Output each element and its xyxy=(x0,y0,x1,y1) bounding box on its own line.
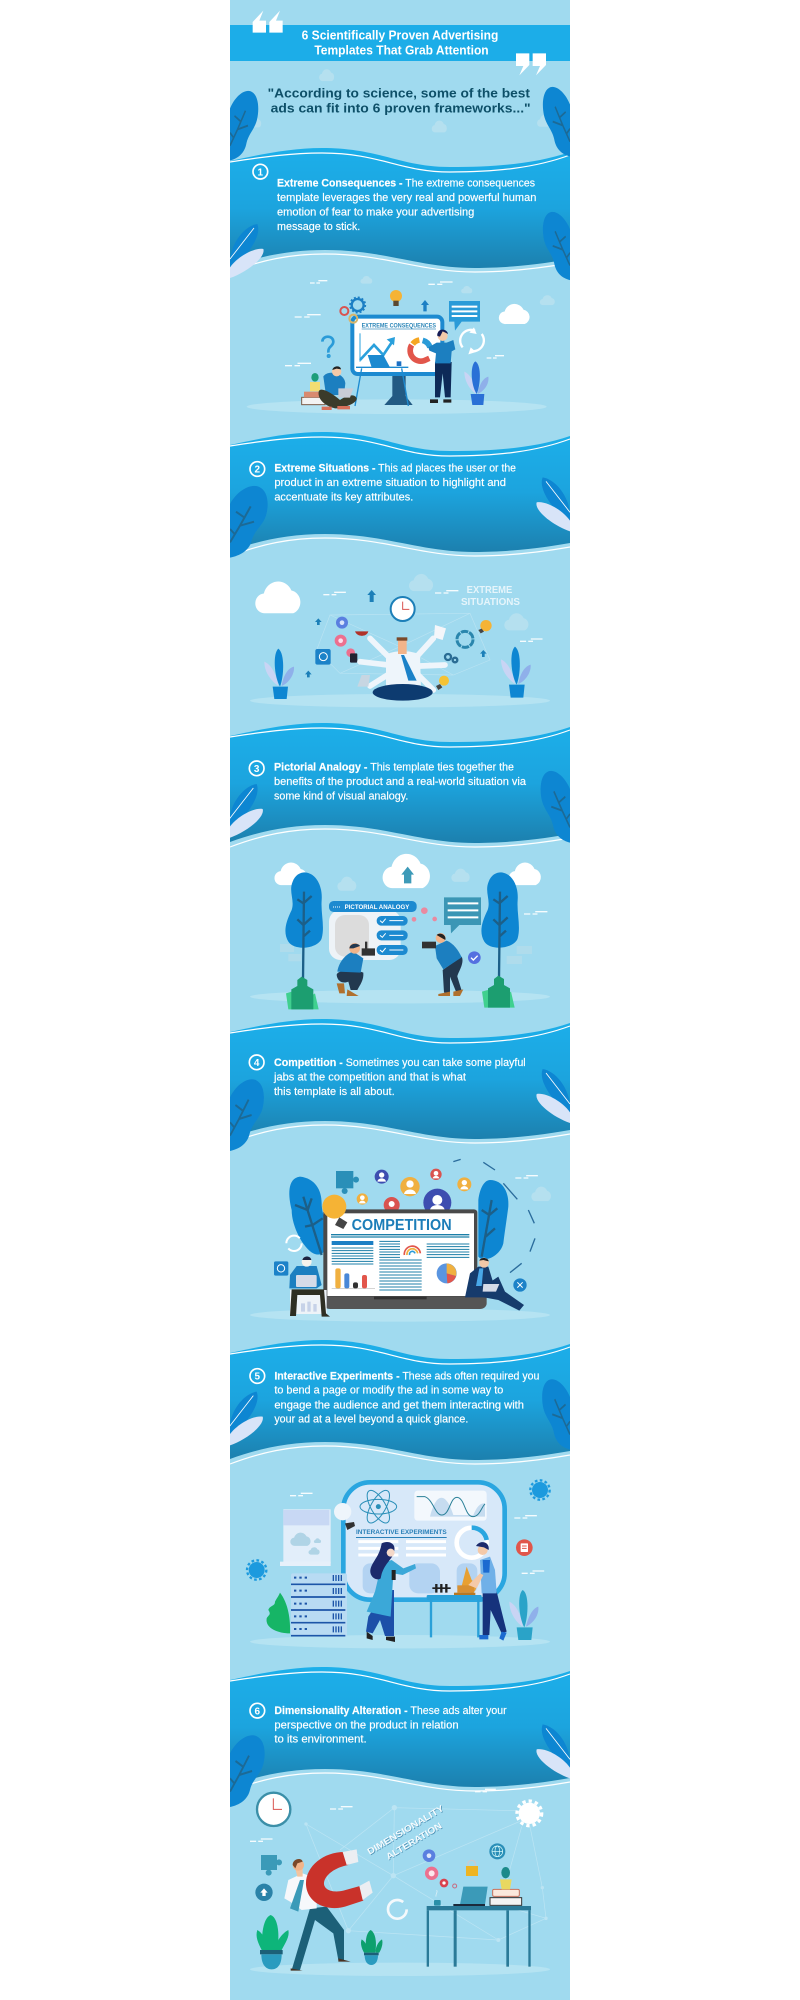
books and cactus xyxy=(490,1867,522,1905)
green leaf xyxy=(267,1593,290,1633)
window xyxy=(280,1509,331,1566)
badge 2 xyxy=(250,462,265,476)
light bulb xyxy=(390,290,402,306)
icon: opening quote marks xyxy=(253,11,283,33)
icon: band 3 tree xyxy=(541,771,570,843)
magnet xyxy=(306,1849,373,1908)
arrow up in cloud xyxy=(401,867,414,883)
badge 1 xyxy=(253,164,268,179)
small plant xyxy=(361,1930,382,1965)
icon: band 1 right tree xyxy=(543,212,570,280)
section 1 text xyxy=(230,87,570,280)
potted plant right xyxy=(501,647,531,698)
text: extreme consequences: message to stick. xyxy=(277,221,360,233)
icon: band 5 tree xyxy=(542,1379,570,1450)
donut xyxy=(388,1900,407,1919)
badge 4 xyxy=(249,1055,264,1070)
section 3 text xyxy=(229,761,570,843)
rounded blocks xyxy=(363,1563,477,1593)
woman scientist xyxy=(366,1542,416,1642)
section 5 text xyxy=(229,1369,570,1450)
speech bubble xyxy=(449,301,480,331)
network lines xyxy=(317,613,490,675)
text: pictorial analogy: some kind of visual analogy. xyxy=(274,790,408,802)
badge 3 xyxy=(249,761,264,776)
dashes xyxy=(524,912,547,914)
label: extreme situations: SITUATIONS xyxy=(461,597,520,608)
text: interactive experiments: engage the audience and get them interacting with xyxy=(274,1399,524,1411)
icon: band 3 plume leaves xyxy=(229,784,263,838)
pictorial analogy card: PICTORIAL ANALOGY xyxy=(345,904,410,911)
ring chart xyxy=(457,631,473,647)
badge 6: 6 xyxy=(255,1706,261,1717)
icon: top left tree xyxy=(230,91,258,161)
potted plant left xyxy=(264,649,294,699)
dashes xyxy=(285,281,504,366)
timer bubble xyxy=(274,1261,288,1276)
text: extreme consequences: emotion of fear to make your advertising xyxy=(277,206,474,218)
atom icon xyxy=(360,1487,397,1526)
left tree xyxy=(285,872,323,980)
rotated label: dimensionality alteration: ALTERATION xyxy=(384,1821,444,1862)
right tree xyxy=(481,872,519,978)
faint boxes xyxy=(280,944,532,964)
arrow badge xyxy=(255,1884,273,1901)
microscope xyxy=(454,1567,476,1595)
line chart xyxy=(360,333,395,362)
laptop xyxy=(368,355,390,367)
man with magnet xyxy=(284,1859,351,1971)
badge 1: 1 xyxy=(258,167,264,178)
monitor stand xyxy=(384,376,413,405)
title xyxy=(302,30,498,57)
clouds xyxy=(274,854,541,891)
man right seated xyxy=(465,1258,524,1311)
section 4 text xyxy=(230,1055,570,1151)
monitor title: EXTREME CONSEQUENCES xyxy=(362,322,436,329)
text: extreme consequences: Extreme Consequences - The extreme consequences xyxy=(277,178,535,190)
dashes xyxy=(515,1176,538,1178)
icon: band 5 plume leaves xyxy=(229,1392,263,1446)
icon: band 2 plume leaves xyxy=(536,477,570,531)
badge 4: 4 xyxy=(254,1058,260,1069)
light bulb xyxy=(334,1503,355,1530)
avatars xyxy=(357,1169,471,1217)
badge check xyxy=(468,951,481,964)
arc chart xyxy=(404,1246,420,1255)
dashes xyxy=(250,1789,496,1841)
pictorial analogy card xyxy=(329,901,417,960)
man left on box xyxy=(289,1256,330,1317)
man scientist xyxy=(468,1542,507,1641)
icon: closing quote marks xyxy=(516,53,546,75)
icon: band 6 plume leaves xyxy=(536,1724,570,1778)
social icons xyxy=(315,617,357,665)
icon: band 2 tree xyxy=(230,486,268,558)
plant green xyxy=(257,1915,289,1969)
text: extreme consequences xyxy=(277,178,536,233)
wave band 4 xyxy=(230,1019,570,1143)
desk xyxy=(427,1906,531,1967)
quote subheading: ads can fit into 6 proven frameworks..." xyxy=(271,101,531,116)
text: pictorial analogy xyxy=(274,762,526,802)
illustration 2: extreme situations xyxy=(250,574,550,707)
quote subheading: "According to science, some of the best xyxy=(268,85,531,100)
text: pictorial analogy: benefits of the product and a real-world situation via xyxy=(274,776,526,788)
label: extreme situations: EXTREME xyxy=(467,585,513,596)
question mark xyxy=(322,337,333,357)
left tree xyxy=(289,1177,329,1255)
lab table xyxy=(427,1595,482,1637)
text: interactive experiments: your ad at a level beyond a quick glance. xyxy=(274,1414,468,1426)
red document badge xyxy=(516,1539,533,1556)
woman presenter xyxy=(428,330,455,403)
refresh icon xyxy=(460,327,484,354)
icon: band 4 tree xyxy=(230,1079,264,1151)
text: extreme consequences: template leverages the very real and powerful human xyxy=(277,192,536,204)
badge 3: 3 xyxy=(254,764,260,775)
icon: top right tree xyxy=(543,87,570,157)
donut chart xyxy=(410,340,430,361)
puzzle piece xyxy=(261,1855,282,1876)
illustration 3: pictorial analogy xyxy=(250,854,550,1009)
ground xyxy=(250,990,550,1003)
bending photographer xyxy=(422,933,463,996)
multi-armed man xyxy=(355,625,446,701)
big display frame xyxy=(343,1482,505,1600)
wave band 6 xyxy=(230,1667,570,1791)
illustration 4: competition xyxy=(250,1159,551,1322)
title banner xyxy=(230,25,570,61)
ground xyxy=(250,694,550,707)
section 2 text xyxy=(230,462,570,558)
clock xyxy=(257,1793,290,1826)
donut xyxy=(457,1528,487,1558)
crouching photographer xyxy=(337,942,375,996)
arrow up xyxy=(421,300,429,311)
article lines xyxy=(331,1235,469,1290)
infographic panel xyxy=(229,0,570,2000)
icon: band 4 plume leaves xyxy=(536,1069,570,1123)
rotated label: dimensionality alteration: DIMENSIONALITY xyxy=(366,1803,446,1857)
text: dimensionality alteration: perspective on the product in relation xyxy=(274,1720,459,1732)
dashes xyxy=(290,1493,544,1573)
bulbs xyxy=(436,620,492,690)
ground xyxy=(250,1963,550,1976)
clouds xyxy=(255,574,528,630)
text: interactive experiments: Interactive Experiments - These ads often required you xyxy=(274,1370,539,1382)
right tree xyxy=(478,1180,508,1259)
command badge xyxy=(513,1278,527,1292)
badge 5: 5 xyxy=(255,1372,261,1383)
text: dimensionality alteration: Dimensionality Alteration - These ads alter your xyxy=(274,1705,507,1717)
gear xyxy=(517,1801,542,1826)
puzzle piece xyxy=(336,1171,359,1194)
bushes xyxy=(286,976,515,1009)
badge 2: 2 xyxy=(255,465,261,476)
text: interactive experiments xyxy=(274,1370,539,1426)
text: extreme situations xyxy=(274,463,516,504)
server rack xyxy=(291,1573,347,1637)
laptop xyxy=(323,1209,487,1309)
padlock xyxy=(466,1860,478,1876)
network lines xyxy=(304,1805,548,1942)
bar chart xyxy=(332,1268,375,1289)
badge 6 xyxy=(250,1703,265,1718)
clouds xyxy=(360,276,555,324)
illustration 5: interactive experiments xyxy=(247,1480,550,1648)
title: 6 Scientifically Proven Advertising xyxy=(302,27,498,42)
faint clouds xyxy=(248,69,552,132)
icon: band 6 tree xyxy=(230,1735,265,1807)
dashed arc xyxy=(453,1159,535,1273)
rotated label: dimensionality alteration: ALTERATION xyxy=(385,1821,444,1862)
globe icon xyxy=(489,1843,505,1859)
rotated label: dimensionality alteration: DIMENSIONALITY xyxy=(366,1804,446,1857)
monitor xyxy=(352,317,442,406)
test tubes xyxy=(432,1584,451,1593)
books and cactus xyxy=(302,373,325,405)
ground xyxy=(250,1635,550,1648)
clock xyxy=(391,597,415,621)
light bulb xyxy=(322,1195,347,1229)
text: dimensionality alteration xyxy=(274,1705,507,1746)
text: competition: Competition - Sometimes you can take some playful xyxy=(274,1057,526,1069)
illustration 6: dimensionality alteration xyxy=(250,1789,550,1976)
illustration 1: extreme consequences xyxy=(247,276,555,414)
laptop xyxy=(453,1887,488,1906)
seated man xyxy=(319,366,357,410)
gears xyxy=(247,1480,550,1580)
faint cloud xyxy=(531,1187,551,1201)
wave band 1 xyxy=(230,148,570,272)
gears xyxy=(445,654,457,662)
pink dots xyxy=(412,907,437,922)
refresh icon xyxy=(286,1236,302,1251)
checklist xyxy=(377,916,408,955)
gears xyxy=(340,297,365,323)
potted plant xyxy=(509,1590,538,1640)
potted plant xyxy=(464,361,488,405)
text: dimensionality alteration: to its environment. xyxy=(274,1734,367,1746)
ground xyxy=(247,399,547,414)
ground xyxy=(250,1308,550,1322)
text lines xyxy=(358,1542,446,1555)
experiment label: INTERACTIVE EXPERIMENTS xyxy=(356,1529,447,1536)
arrows xyxy=(305,590,487,677)
text: competition: this template is all about. xyxy=(274,1086,395,1098)
text: competition: jabs at the competition and that is what xyxy=(273,1072,466,1084)
wave chart xyxy=(414,1491,487,1521)
icon: band 1 plume leaves xyxy=(230,224,264,278)
pie chart xyxy=(437,1263,457,1283)
competition heading: COMPETITION xyxy=(352,1217,452,1234)
text: pictorial analogy: Pictorial Analogy - This template ties together the xyxy=(274,762,514,774)
speech bubble xyxy=(444,897,481,933)
wave band 2 xyxy=(230,432,570,556)
badge 5 xyxy=(250,1369,265,1383)
label: extreme situations xyxy=(461,585,520,608)
text: extreme situations: Extreme Situations - This ad places the user or the xyxy=(274,463,516,475)
cup xyxy=(434,1890,441,1906)
wave band 3 xyxy=(230,723,570,847)
title: Templates That Grab Attention xyxy=(314,42,489,57)
shelf xyxy=(355,361,408,406)
text: extreme situations: accentuate its key attributes. xyxy=(274,492,413,504)
text: interactive experiments: to bend a page or modify the ad in some way to xyxy=(274,1385,503,1397)
dashes xyxy=(323,591,543,641)
text: extreme situations: product in an extreme situation to highlight and xyxy=(274,477,506,489)
social icons xyxy=(423,1849,457,1888)
header xyxy=(230,11,570,132)
text: competition xyxy=(273,1057,526,1098)
quote subheading xyxy=(268,88,530,115)
wave band 5 xyxy=(230,1340,570,1464)
section 6 text xyxy=(230,1703,570,1807)
